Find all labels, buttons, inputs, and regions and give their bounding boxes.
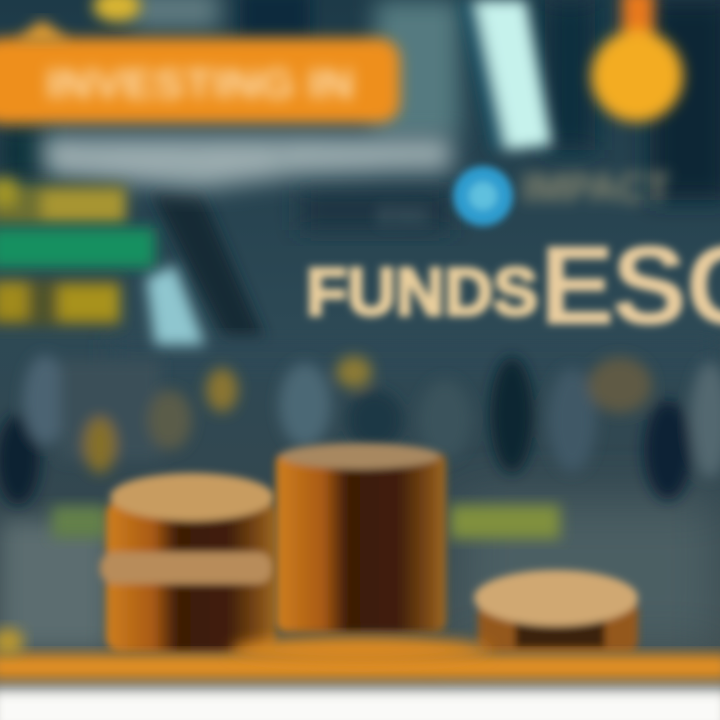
subtitle band — [40, 135, 455, 190]
coin stack: right — [474, 570, 638, 652]
main heading: ESG — [306, 223, 720, 348]
yellow row — [0, 178, 126, 225]
green row — [0, 228, 155, 268]
subtitle band: Sustainable Finance — [50, 142, 445, 180]
icon: small top lamp — [93, 0, 141, 22]
footer strip — [0, 688, 720, 720]
coin stack: left — [100, 473, 276, 652]
icon: light beam — [462, 0, 552, 150]
orange ground — [0, 628, 720, 680]
coin stack: centre — [276, 443, 446, 632]
icon: pale blue shard — [146, 265, 205, 345]
small heading: IMPACT — [522, 164, 670, 211]
icon: blue circle — [453, 166, 513, 226]
small dark label: ESG — [378, 203, 429, 230]
main heading: ESG: FUNDS — [306, 254, 538, 330]
crowd of people — [0, 355, 720, 505]
icon: hanging light bulb — [591, 0, 683, 122]
yellow row lower — [0, 280, 120, 326]
title banner — [0, 20, 400, 124]
green ground labels — [52, 505, 560, 539]
title banner: INVESTING IN — [46, 60, 354, 107]
panel: left legend — [0, 178, 155, 326]
